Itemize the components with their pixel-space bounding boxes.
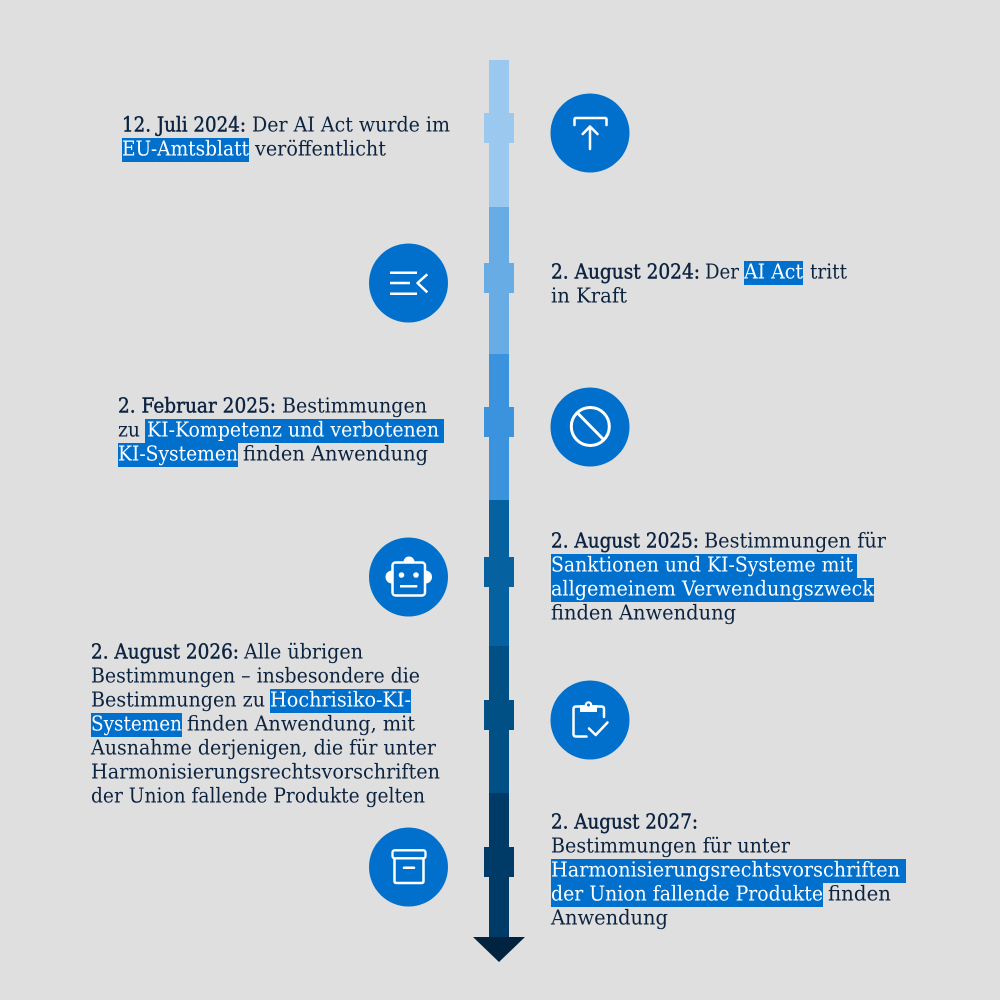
text block: 2. Februar 2025: KI-Systemen — [118, 441, 238, 465]
text block: 2. August 2026: finden Anwendung, mit — [187, 711, 415, 735]
text block: 2. August 2024 — [551, 259, 847, 307]
text block: 2. August 2025: allgemeinem Verwendungszweck — [551, 576, 875, 600]
text block: 2. August 2026: Bestimmungen zu — [91, 687, 265, 711]
text block: 2. August 2026: Hochrisiko-KI- — [270, 687, 411, 711]
text block: 2. August 2026 — [90, 639, 440, 807]
text block: 2. August 2025: Sanktionen und KI-Systeme mit — [551, 552, 853, 576]
text block: 2. August 2024: AI Act — [743, 259, 803, 283]
text block: 12. Juli 2024: veröffentlicht — [254, 136, 386, 160]
icon: clipboard with check — [550, 680, 630, 760]
text block: 12. Juli 2024: EU-Amtsblatt — [122, 136, 249, 160]
timeline arrow — [473, 60, 525, 962]
text block: 2. Februar 2025: zu — [118, 417, 140, 441]
text block: 2. August 2027: finden — [828, 881, 891, 905]
text block: 2. August 2027: Anwendung — [550, 905, 668, 929]
icon: robot — [369, 538, 448, 616]
text block: 12. Juli 2024 — [122, 112, 450, 162]
icon: upload — [550, 94, 630, 172]
text block: 2. Februar 2025: finden Anwendung — [243, 441, 428, 465]
text block: 2. August 2024: in Kraft — [551, 283, 627, 307]
text block: 2. Februar 2025 — [118, 393, 444, 467]
text block: 2. August 2027: Bestimmungen für unter — [551, 833, 790, 857]
text block: 2. August 2026: Ausnahme derjenigen, die für unter — [90, 735, 436, 759]
text block: 2. August 2025 — [551, 528, 886, 624]
text block: 2. August 2025: finden Anwendung — [551, 600, 736, 624]
text block: 2. August 2025: 2. August 2025: — [551, 528, 699, 552]
text block: 2. Februar 2025: Bestimmungen — [282, 393, 427, 417]
icon: archive box — [369, 828, 448, 906]
text block: 2. August 2024: Der — [705, 259, 739, 283]
text block: 2. August 2027 — [550, 809, 906, 929]
text block: 2. August 2026: Systemen — [91, 711, 182, 735]
text block: 12. Juli 2024: Der AI Act wurde im — [252, 112, 450, 136]
text block: 2. Februar 2025: 2. Februar 2025: — [118, 393, 276, 417]
text block: 2. August 2026: Harmonisierungsrechtsvorschriften — [91, 759, 440, 783]
icon: prohibited — [550, 388, 630, 466]
text block: 2. August 2027: der Union fallende Produkte — [551, 881, 823, 905]
text block: 12. Juli 2024: 12. Juli 2024: — [122, 112, 246, 136]
text block: 2. Februar 2025: KI-Kompetenz und verbotenen — [147, 417, 439, 441]
text block: 2. August 2026: Alle übrigen — [243, 639, 363, 663]
text block: 2. August 2024: tritt — [810, 259, 847, 283]
text block: 2. August 2024: 2. August 2024: — [551, 259, 700, 283]
text block: 2. August 2027: Harmonisierungsrechtsvorschriften — [551, 857, 900, 881]
text block: 2. August 2026: 2. August 2026: — [91, 639, 239, 663]
icon: list with chevron — [369, 244, 448, 322]
text block: 2. August 2025: Bestimmungen für — [704, 528, 886, 552]
text block: 2. August 2027: 2. August 2027: — [551, 809, 698, 833]
text block: 2. August 2026: Bestimmungen – insbesondere die — [91, 663, 420, 687]
text block: 2. August 2026: der Union fallende Produkte gelten — [91, 783, 425, 807]
